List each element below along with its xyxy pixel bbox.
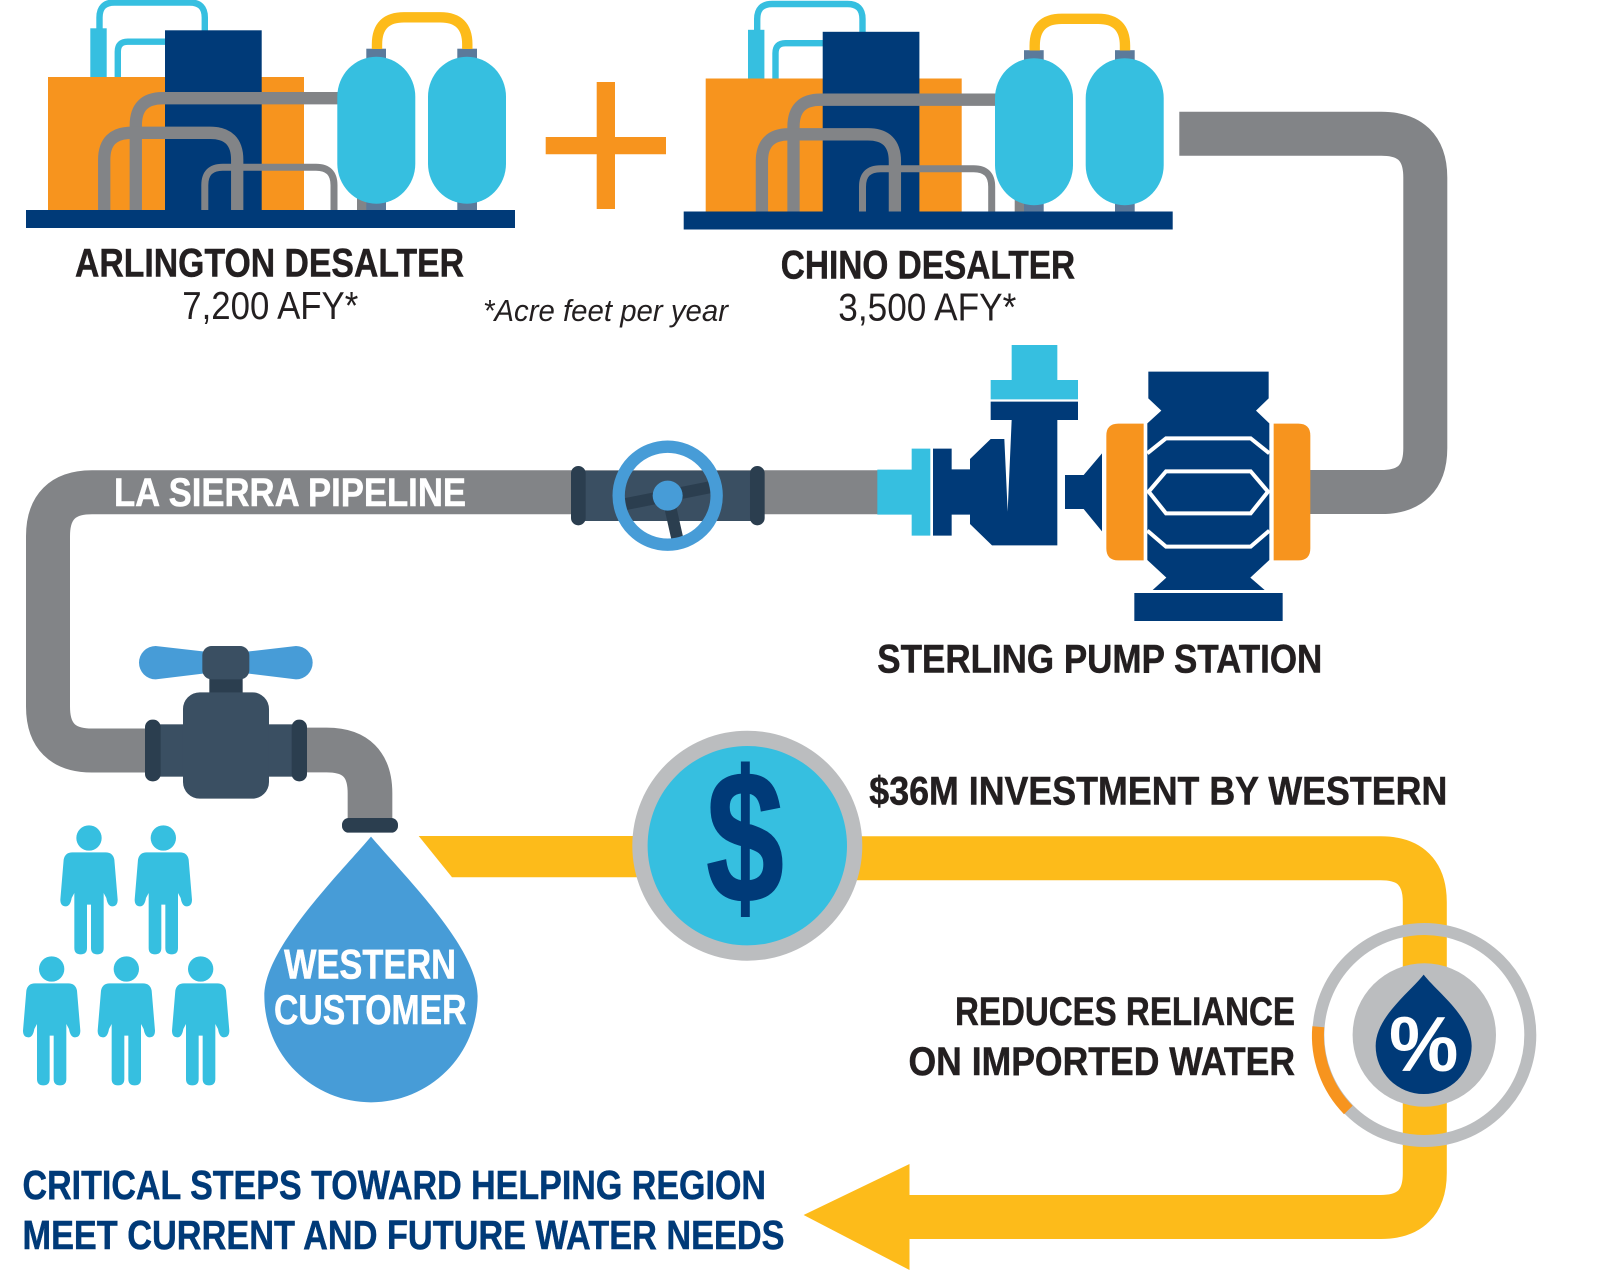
handle blades (139, 646, 205, 679)
grey pipeline from Chino desalter to pump station (1179, 134, 1425, 492)
drop shape (264, 837, 478, 1102)
people group (23, 825, 229, 1085)
Chino desalter illustration (684, 4, 1173, 230)
icon: valve wheel on pipeline (571, 447, 765, 545)
Chino label: CHINO DESALTER (781, 243, 1075, 287)
grey foot (357, 195, 367, 211)
blue pressure vessels (995, 58, 1073, 205)
footnote: *Acre feet per year (483, 293, 730, 328)
spokes (626, 487, 709, 539)
yellow investment path (419, 836, 1425, 1270)
blue pressure vessels (337, 57, 415, 204)
grey foot (1015, 196, 1025, 212)
navy base (684, 212, 1173, 230)
Arlington desalter illustration (26, 2, 515, 228)
investment label: $36M INVESTMENT BY WESTERN (869, 770, 1447, 814)
pipeline label: LA SIERRA PIPELINE (114, 471, 466, 515)
plus sign (546, 82, 666, 209)
flanges (571, 466, 586, 525)
navy drop (1376, 975, 1472, 1094)
person (135, 825, 192, 954)
main yellow pipe (840, 858, 1425, 1217)
coupling (1065, 453, 1102, 531)
icon: dollar coin (632, 731, 862, 961)
Arlington label: ARLINGTON DESALTER (75, 242, 464, 286)
Arlington label (75, 242, 464, 328)
faucet body (157, 724, 295, 777)
La Sierra pipeline (48, 471, 880, 750)
reliance label: REDUCES RELIANCE (955, 990, 1295, 1034)
closing statement (22, 1162, 784, 1258)
person (60, 825, 118, 954)
grey process pipes (762, 100, 998, 212)
yellow connector (1035, 19, 1125, 50)
yellow connector (377, 17, 467, 49)
valve body (583, 471, 753, 521)
outer ring (1318, 929, 1530, 1141)
closing statement: CRITICAL STEPS TOWARD HELPING REGION (22, 1162, 766, 1208)
person (172, 956, 229, 1085)
hub (653, 481, 683, 511)
drop text: WESTERN (284, 940, 456, 987)
navy tower (165, 30, 262, 211)
stem (209, 677, 243, 697)
closing statement: MEET CURRENT AND FUTURE WATER NEEDS (22, 1212, 784, 1258)
navy base (26, 210, 515, 228)
dollar sign: $ (706, 733, 784, 943)
reliance label: ON IMPORTED WATER (908, 1040, 1295, 1084)
icon: faucet (139, 646, 398, 833)
tank feet and connectors (366, 49, 477, 211)
navy tower (823, 32, 919, 213)
cyan pipes (100, 2, 205, 78)
white wheel opening below body (630, 521, 705, 544)
grey pipe (48, 492, 880, 750)
motor base (1134, 593, 1283, 621)
nozzle nut (342, 818, 398, 833)
grey hub (1353, 963, 1496, 1107)
icon: percent gauge (1318, 929, 1530, 1141)
pump housing (933, 402, 1078, 545)
Chino label (781, 243, 1075, 330)
water drop: Western customer: CUSTOMER (274, 986, 466, 1033)
orange ring segment (1318, 1027, 1348, 1110)
grey process pipes (104, 98, 340, 211)
motor body (1147, 372, 1269, 590)
coin ring (632, 731, 862, 961)
orange tank (48, 77, 304, 211)
motor white lines (1147, 438, 1269, 547)
cyan pipes (757, 4, 862, 80)
arrow head (804, 1164, 910, 1270)
orange tank (706, 78, 962, 212)
flanges (145, 720, 161, 781)
spout (300, 750, 370, 821)
tank feet and connectors (1024, 50, 1135, 213)
Arlington label: 7,200 AFY* (182, 285, 358, 328)
cyan flange left (877, 449, 930, 536)
water drop: Western customer (264, 837, 478, 1102)
knob (202, 646, 249, 679)
wheel rim (619, 447, 717, 545)
cyan flange top (991, 345, 1078, 399)
person (23, 956, 80, 1085)
left slanted segment (419, 836, 650, 877)
coin face (648, 746, 847, 945)
icon: Sterling pump (877, 345, 1310, 621)
percent sign: % (1389, 1000, 1458, 1088)
reliance label (908, 990, 1295, 1084)
Chino label: 3,500 AFY* (838, 287, 1016, 330)
Sterling label: STERLING PUMP STATION (877, 637, 1322, 681)
person (98, 956, 155, 1085)
orange motor caps (1106, 424, 1144, 560)
